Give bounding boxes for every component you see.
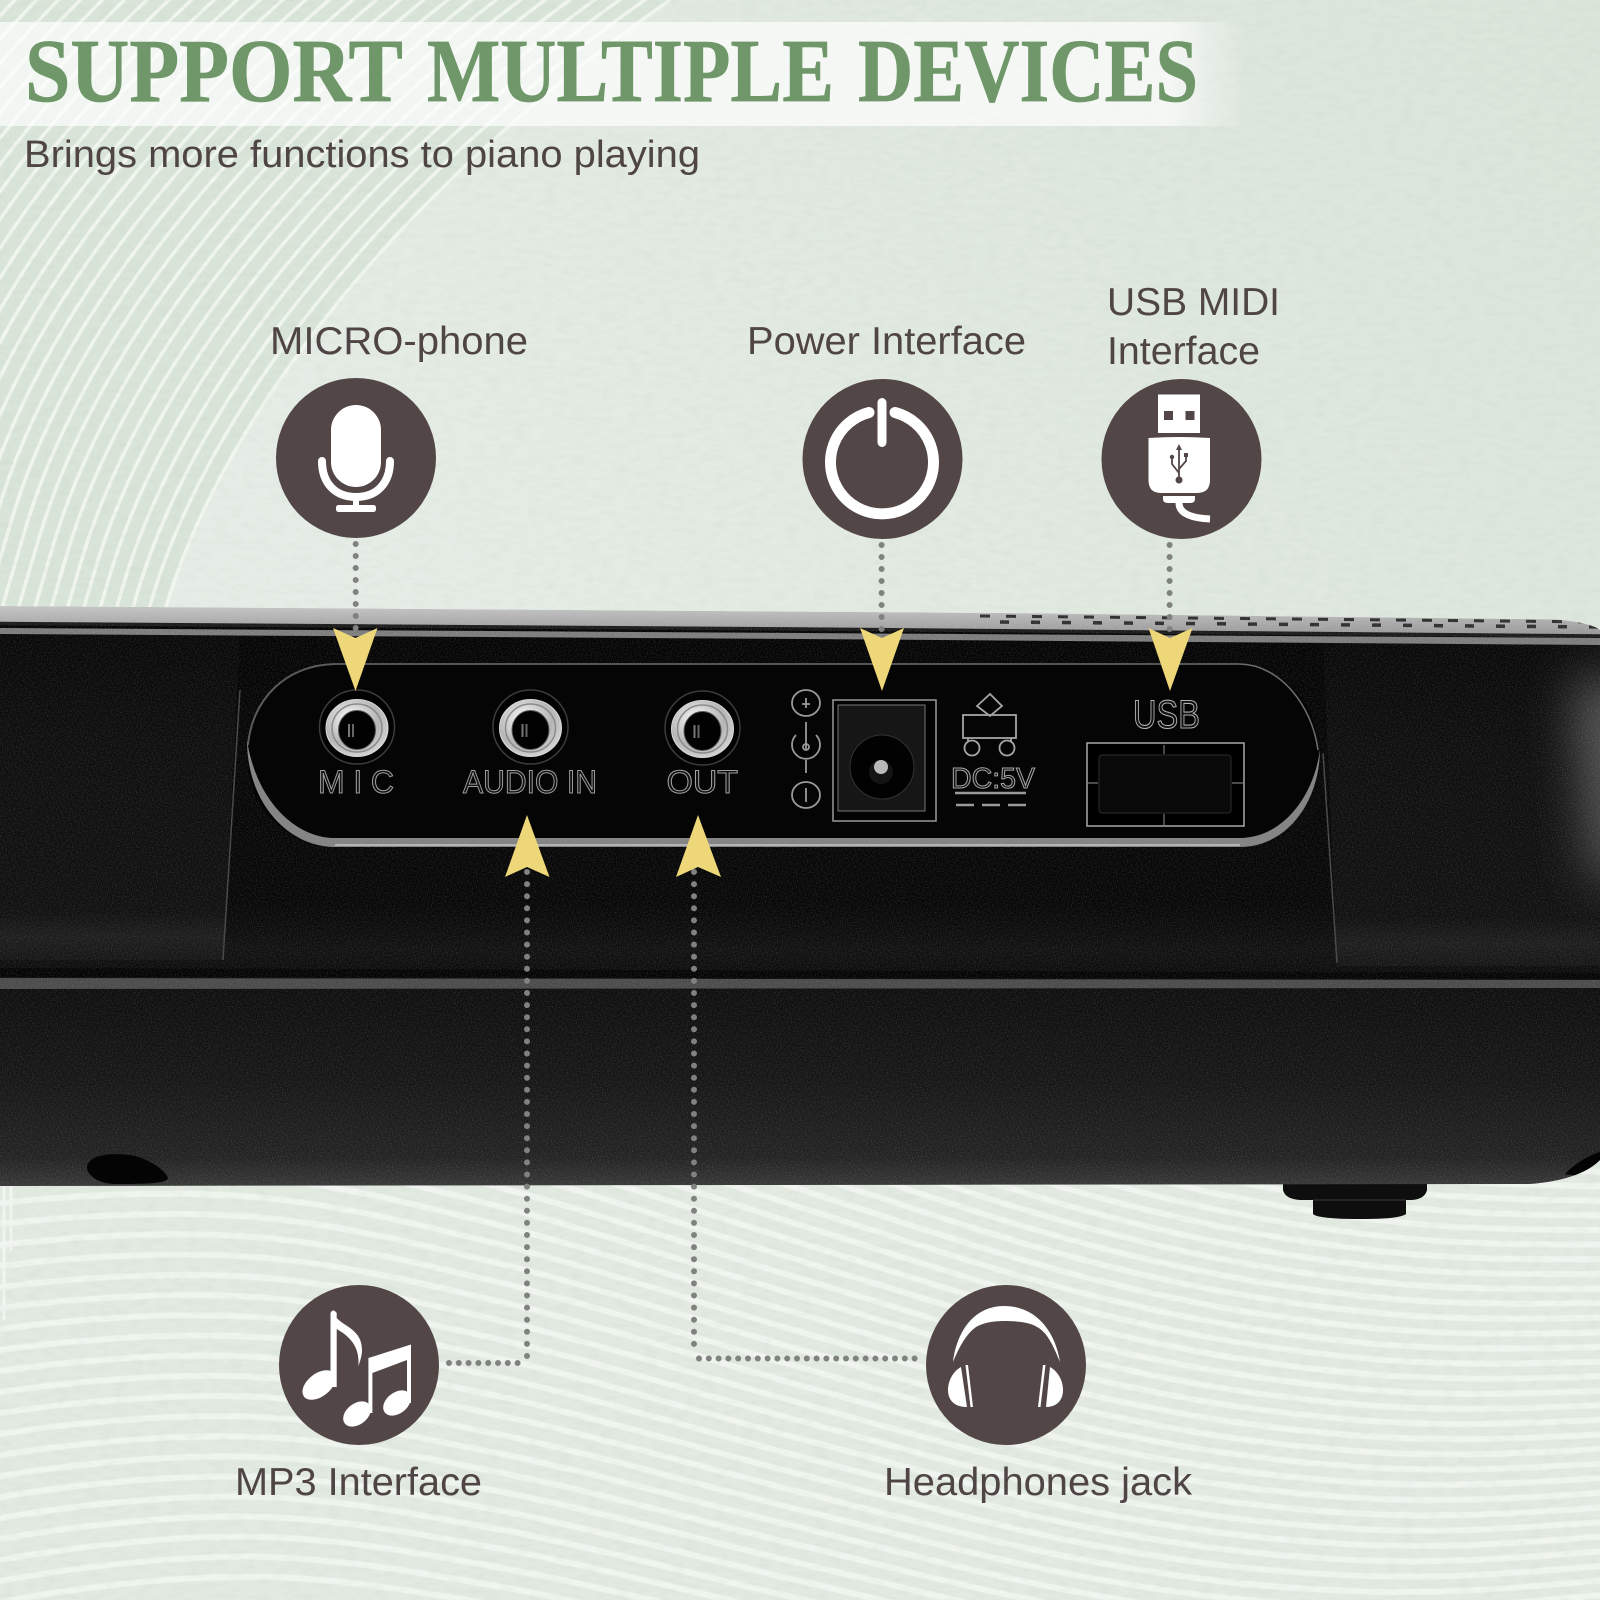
- label: MP3 interface: MP3 Interface: [235, 1461, 482, 1504]
- icon: music notes: [279, 1285, 439, 1445]
- DC power socket: [833, 700, 936, 821]
- label: AUDIO IN: AUDIO IN: [463, 764, 597, 800]
- grain: [0, 600, 1600, 1190]
- icon: USB: [1102, 379, 1262, 539]
- label: USB MIDI interface: Interface: [1107, 330, 1260, 373]
- port panel: [247, 664, 1320, 847]
- power switch symbols: [792, 690, 820, 808]
- label: microphone: MICRO-phone: [270, 320, 528, 363]
- dotted connector: microphone: [353, 544, 359, 640]
- icon: headphones: [926, 1285, 1086, 1445]
- arrow: out: [676, 815, 721, 877]
- jack: AUDIO IN: [493, 690, 568, 764]
- arrow: microphone: [333, 628, 378, 691]
- section lines: [223, 690, 1337, 963]
- title: SUPPORT: [25, 22, 403, 121]
- DC polarity symbol: [963, 694, 1016, 756]
- label: headphones jack: Headphones jack: [884, 1461, 1193, 1504]
- lower body: [0, 977, 1600, 1190]
- dotted connector: MP3: [449, 872, 527, 1363]
- dotted connector: USB: [1167, 545, 1173, 640]
- rubber foot: [1283, 1182, 1427, 1219]
- label: power interface: Power Interface: [747, 320, 1026, 363]
- USB port: [1087, 743, 1244, 826]
- label: OUT: OUT: [666, 764, 738, 800]
- label: MIC: MIC: [318, 764, 394, 800]
- arrow: power: [860, 628, 904, 691]
- label: USB MIDI interface: USB MIDI: [1107, 281, 1280, 324]
- title: MULTIPLE: [427, 22, 834, 121]
- jack: MIC: [320, 690, 394, 764]
- label: USB: USB: [1133, 693, 1200, 737]
- title band: [0, 22, 1245, 126]
- highlight strip: [0, 628, 1600, 645]
- subtitle: Brings more functions to piano playing: [24, 134, 700, 176]
- case holes: [87, 1152, 1600, 1184]
- upper body: [0, 624, 1600, 976]
- label: USB MIDI interface: [1107, 281, 1280, 373]
- title: DEVICES: [858, 22, 1198, 121]
- icon: microphone: [276, 378, 436, 538]
- seam: [0, 968, 1600, 980]
- jack: OUT: [665, 691, 740, 765]
- icon: power: [802, 379, 962, 539]
- arrow: audio in: [505, 815, 550, 877]
- keyboard rear panel photo: [0, 600, 1600, 1219]
- arrow: USB: [1148, 628, 1192, 691]
- title: [25, 22, 1198, 121]
- label: DC:5V: DC:5V: [951, 763, 1036, 795]
- keyboard top edge: [0, 606, 1600, 634]
- dotted connector: headphones: [694, 872, 918, 1358]
- dotted connector: power: [879, 545, 885, 640]
- side sections: [0, 733, 234, 950]
- right highlight: [1575, 680, 1600, 880]
